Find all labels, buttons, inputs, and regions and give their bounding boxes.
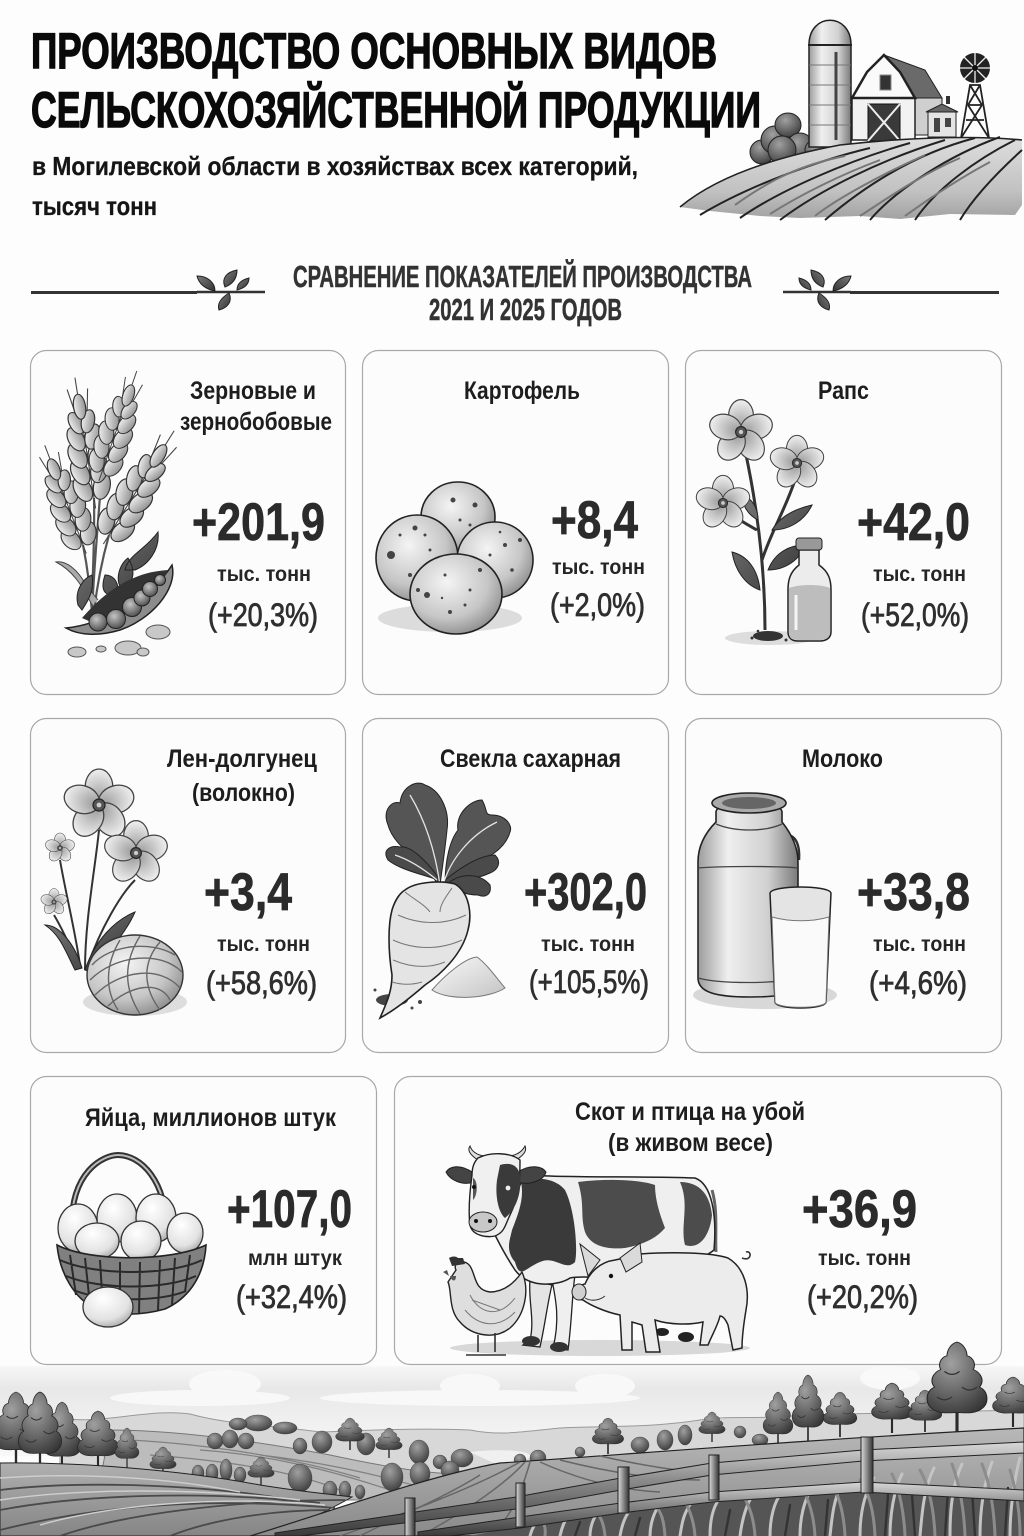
label: Лен-долгунец — [167, 745, 318, 773]
value: +33,8 — [857, 863, 970, 922]
mid fields — [100, 1430, 530, 1500]
panel: milk — [686, 718, 1002, 1052]
label: (волокно) — [192, 779, 295, 807]
divider right with sprig — [783, 270, 999, 310]
icon: potatoes — [376, 482, 533, 634]
icon: wheat and pea pod — [25, 365, 193, 657]
subtitle — [32, 151, 638, 221]
grass — [470, 1458, 1024, 1536]
fence — [275, 1437, 1024, 1536]
unit: тыс. тонн — [818, 1247, 911, 1270]
icon: egg basket — [57, 1155, 206, 1327]
label: Зерновые и — [190, 377, 316, 405]
section heading: СРАВНЕНИЕ ПОКАЗАТЕЛЕЙ ПРОИЗВОДСТВА — [293, 258, 752, 294]
unit: тыс. тонн — [217, 933, 310, 956]
percent: (+32,4%) — [236, 1279, 347, 1315]
unit: тыс. тонн — [873, 563, 966, 586]
panel: rapeseed — [686, 350, 1002, 694]
tree lines — [192, 1415, 768, 1499]
panel: grains — [25, 350, 345, 694]
title — [31, 23, 761, 138]
label: Молоко — [802, 745, 883, 773]
panel: potatoes — [362, 350, 668, 694]
value: +3,4 — [204, 863, 292, 922]
divider left with sprig — [31, 270, 265, 310]
right foreground field — [250, 1428, 1024, 1536]
value: +42,0 — [857, 493, 970, 552]
left foreground field — [0, 1463, 352, 1536]
title: ПРОИЗВОДСТВО ОСНОВНЫХ ВИДОВ — [31, 23, 717, 79]
label: Яйца, миллионов штук — [85, 1104, 336, 1132]
label: Рапс — [818, 377, 869, 405]
scattered trees — [0, 1342, 1024, 1485]
icon: flax flowers and yarn — [40, 769, 187, 1016]
label — [167, 745, 318, 807]
unit: тыс. тонн — [541, 933, 635, 956]
percent: (+20,2%) — [807, 1279, 918, 1315]
section heading: 2021 И 2025 ГОДОВ — [429, 292, 622, 327]
icon: barn — [852, 55, 958, 141]
icon: sugar beet with sugar — [374, 783, 511, 1018]
percent: (+105,5%) — [529, 964, 649, 1000]
unit: млн штук — [248, 1247, 342, 1270]
unit: тыс. тонн — [217, 563, 311, 586]
value: +36,9 — [802, 1180, 917, 1239]
label: Свекла сахарная — [440, 745, 621, 773]
value: +8,4 — [551, 491, 638, 550]
distant hills — [60, 1410, 1024, 1480]
percent: (+2,0%) — [550, 587, 645, 623]
icon: bush — [750, 113, 825, 164]
sky with clouds — [0, 1366, 1024, 1456]
label: Скот и птица на убой — [575, 1098, 805, 1126]
value: +302,0 — [524, 863, 647, 922]
icon: plowed field — [680, 137, 1022, 220]
value: +107,0 — [227, 1180, 352, 1239]
subtitle: в Могилевской области в хозяйствах всех категорий, — [32, 151, 638, 181]
icon: chicken — [443, 1256, 526, 1355]
unit: тыс. тонн — [552, 556, 645, 579]
icon: windmill — [960, 53, 990, 138]
icon: cow, chicken and pig — [443, 1146, 750, 1356]
icon: cow — [446, 1146, 716, 1352]
label: зернобобовые — [180, 408, 332, 436]
label: Картофель — [464, 377, 580, 405]
label — [180, 377, 332, 436]
icon: pig — [572, 1243, 750, 1352]
illustration: rural landscape — [0, 1342, 1024, 1536]
panel: eggs — [30, 1076, 376, 1364]
panel: flax — [30, 718, 346, 1052]
percent: (+20,3%) — [208, 597, 318, 633]
panel: livestock — [394, 1076, 1002, 1364]
panel: sugar beet — [362, 718, 668, 1052]
illustration: farm with silo, barn and windmill — [680, 20, 1022, 220]
icon: silo — [808, 20, 852, 147]
value: +201,9 — [192, 493, 325, 552]
label: (в живом весе) — [608, 1129, 773, 1157]
icon: milk can and glass — [693, 793, 837, 1009]
percent: (+4,6%) — [869, 965, 967, 1001]
percent: (+58,6%) — [206, 965, 317, 1001]
section heading — [293, 258, 752, 327]
subtitle: тысяч тонн — [32, 191, 157, 221]
label — [575, 1098, 805, 1157]
unit: тыс. тонн — [873, 933, 966, 956]
percent: (+52,0%) — [861, 597, 969, 633]
icon: rapeseed plant and oil bottle — [693, 400, 831, 645]
